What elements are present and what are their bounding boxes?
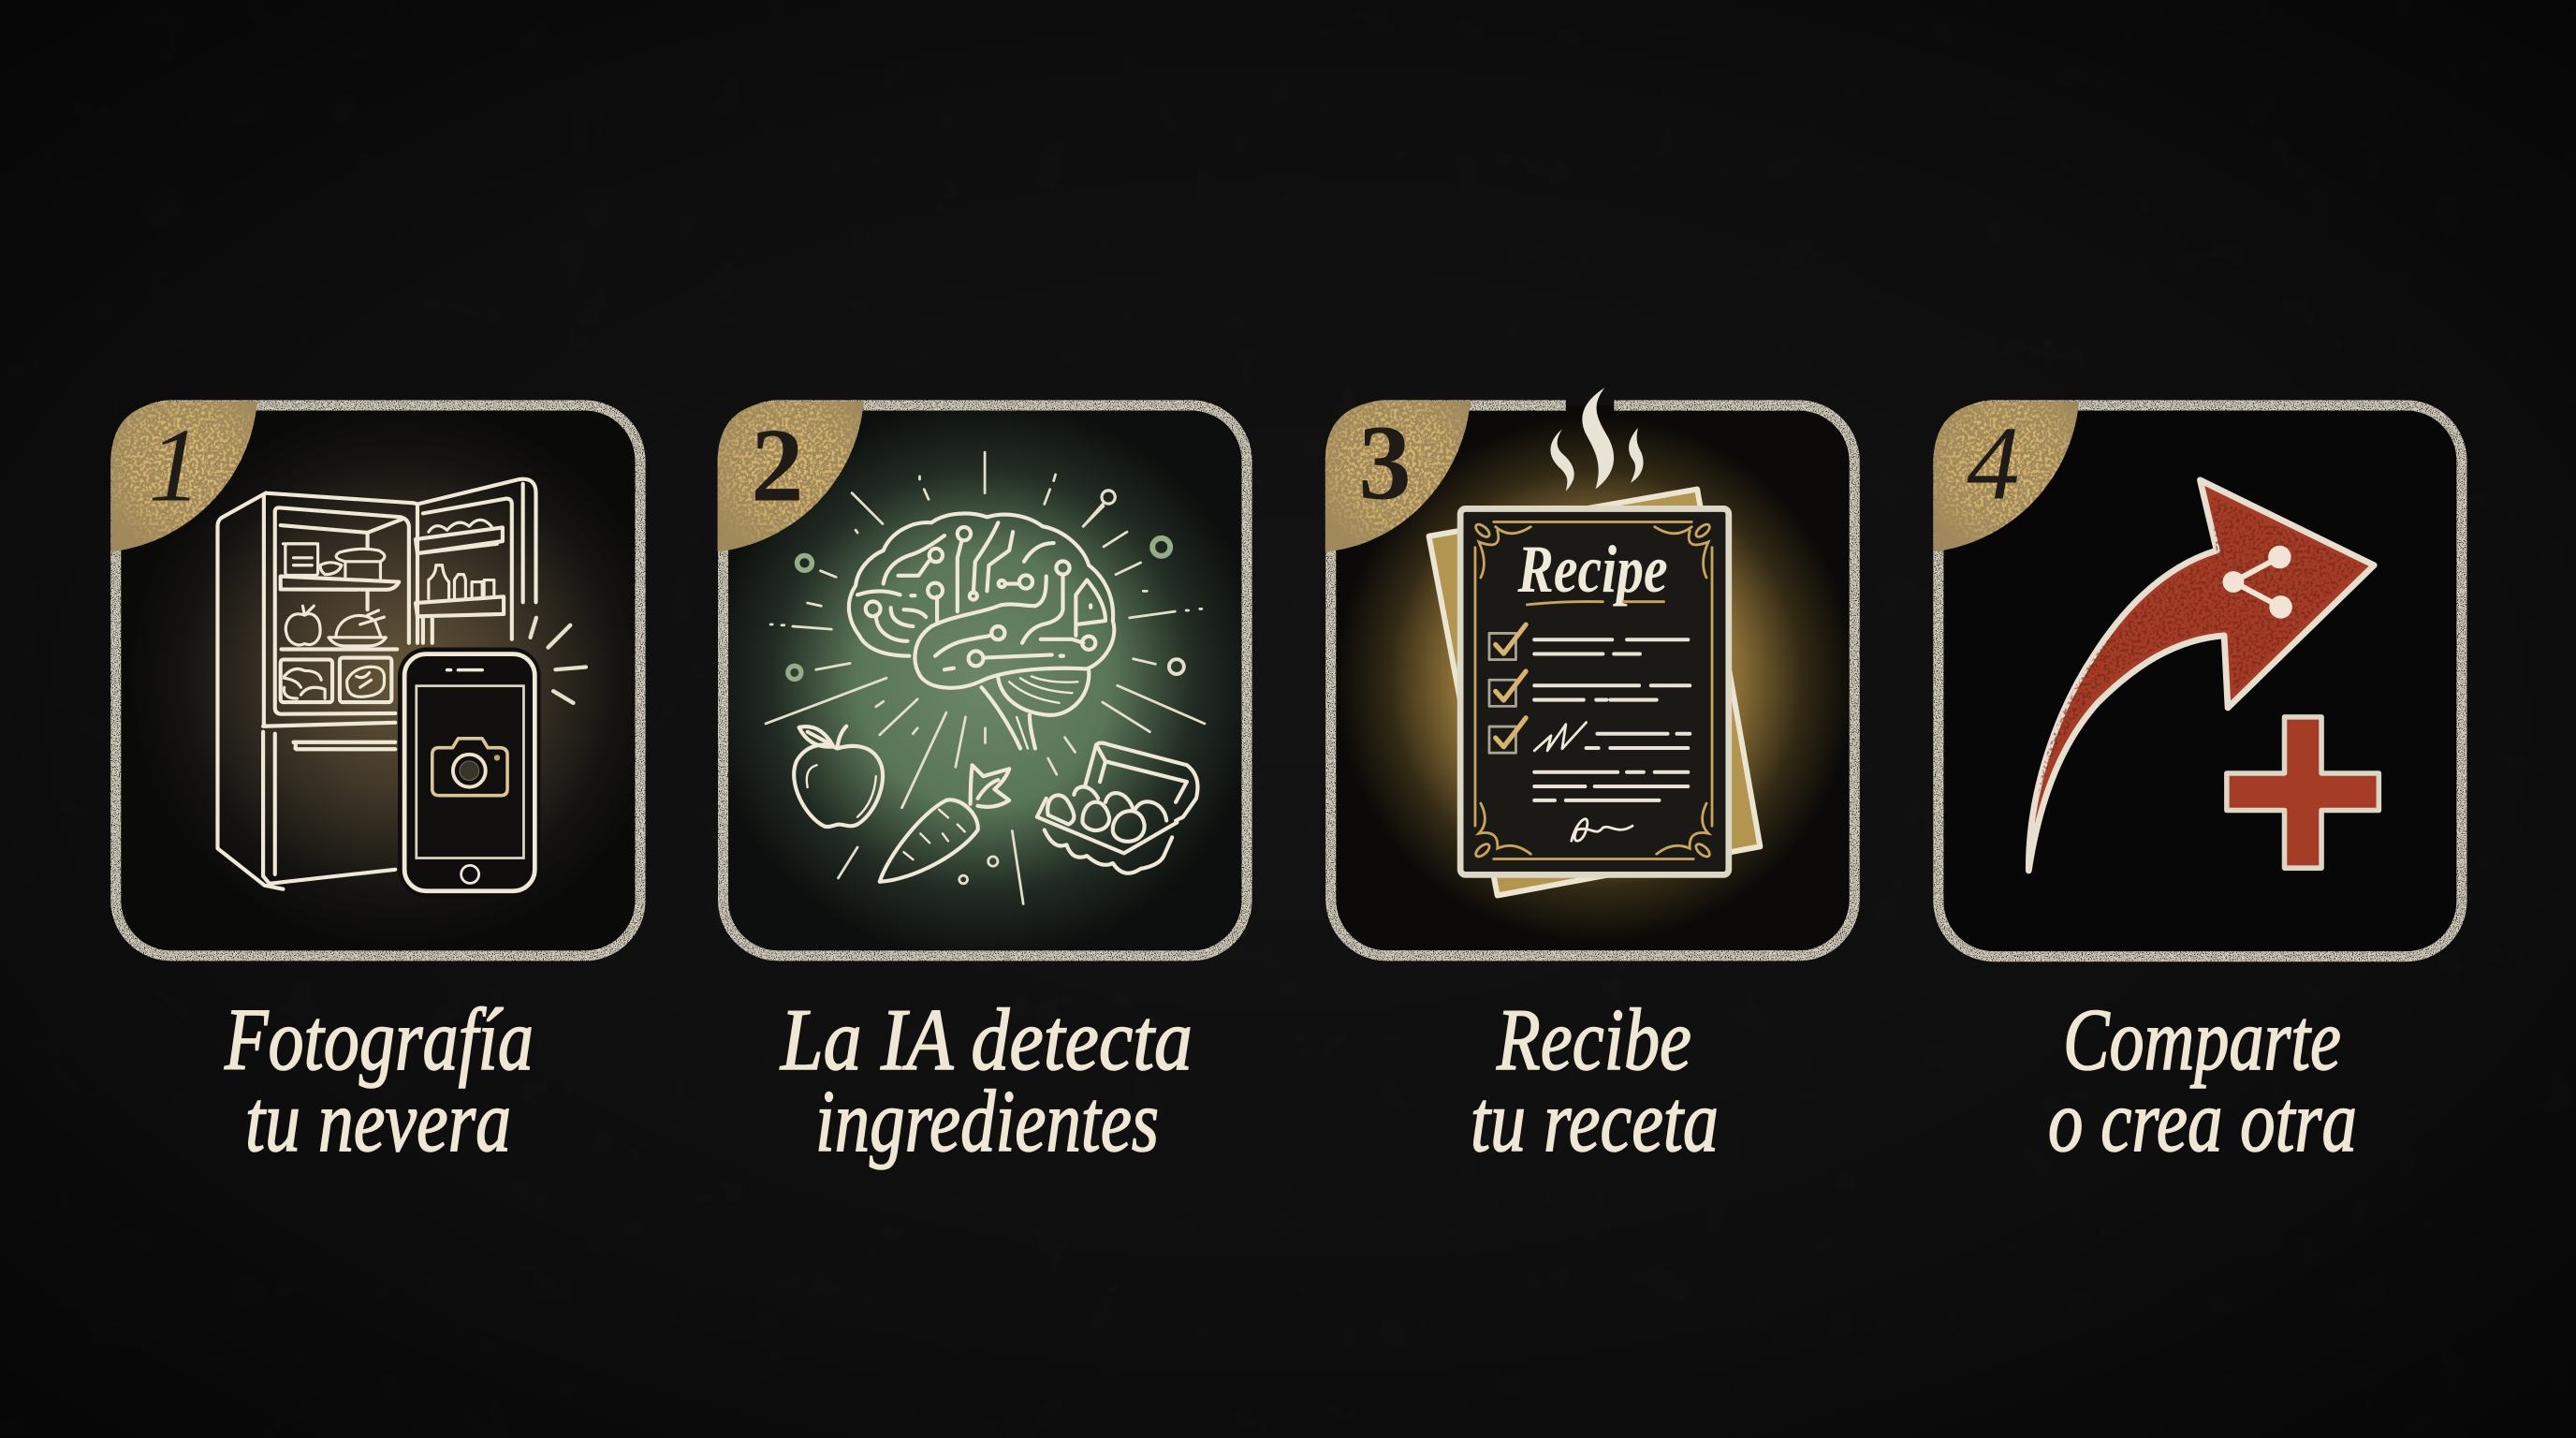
icon: rising steam [1550,388,1644,492]
caption 1: tu nevera [245,1073,511,1170]
handwriting and signature [1534,723,1632,841]
number badge 2 [718,402,864,551]
panel border 3 [1331,405,1854,956]
panel border 1 [116,405,640,956]
caption 2: La IA detecta [779,991,1193,1089]
icon: phone with camera [398,648,541,898]
number badge 1: 1 [149,408,201,524]
checklist [1489,624,1526,753]
icon: fridge food [283,520,494,698]
back recipe card [1429,490,1760,895]
caption 1 [224,991,534,1170]
caption 3: Recibe [1496,991,1691,1089]
panel: step 2 AI detects ingredients [718,402,1247,956]
icon: red share arrow [2028,480,2374,871]
icon: circuit brain [849,513,1114,748]
panel: step 4 share or create another [1934,402,2462,957]
icon: carrot [880,765,1009,882]
number badge 1 [111,402,257,551]
number badge 2: 2 [751,408,804,524]
ornate gold frame [1473,522,1712,859]
icon: red plus [2227,717,2378,868]
caption 4 [2048,991,2357,1170]
door [417,484,523,643]
icon: egg carton [1037,743,1197,873]
caption 3: tu receta [1471,1073,1719,1170]
text lines [1534,639,1690,800]
caption 2 [779,991,1193,1170]
front recipe card [1460,508,1729,874]
number badge 3: 3 [1358,404,1412,522]
panel: step 1 photograph your fridge [111,402,640,956]
caption 4: Comparte [2063,991,2341,1089]
icon: radiating rays [766,452,1205,904]
recipe title: Recipe [1517,534,1668,607]
icon: apple [794,726,883,827]
panel border 4 [1939,405,2462,957]
icon: network nodes [788,491,1184,884]
icon: open fridge [217,479,536,889]
panel: step 3 receive your recipe [1325,388,1854,956]
caption 4: o crea otra [2048,1073,2357,1170]
caption 2: ingredientes [815,1073,1159,1170]
share symbol [2223,546,2292,619]
number badge 4: 4 [1967,406,2020,522]
number badge 3 [1325,401,1471,551]
panel border 2 [724,405,1247,956]
icon: camera flash rays [531,618,586,703]
caption 3 [1471,991,1719,1170]
caption 1: Fotografía [224,991,534,1089]
number badge 4 [1934,402,2079,551]
